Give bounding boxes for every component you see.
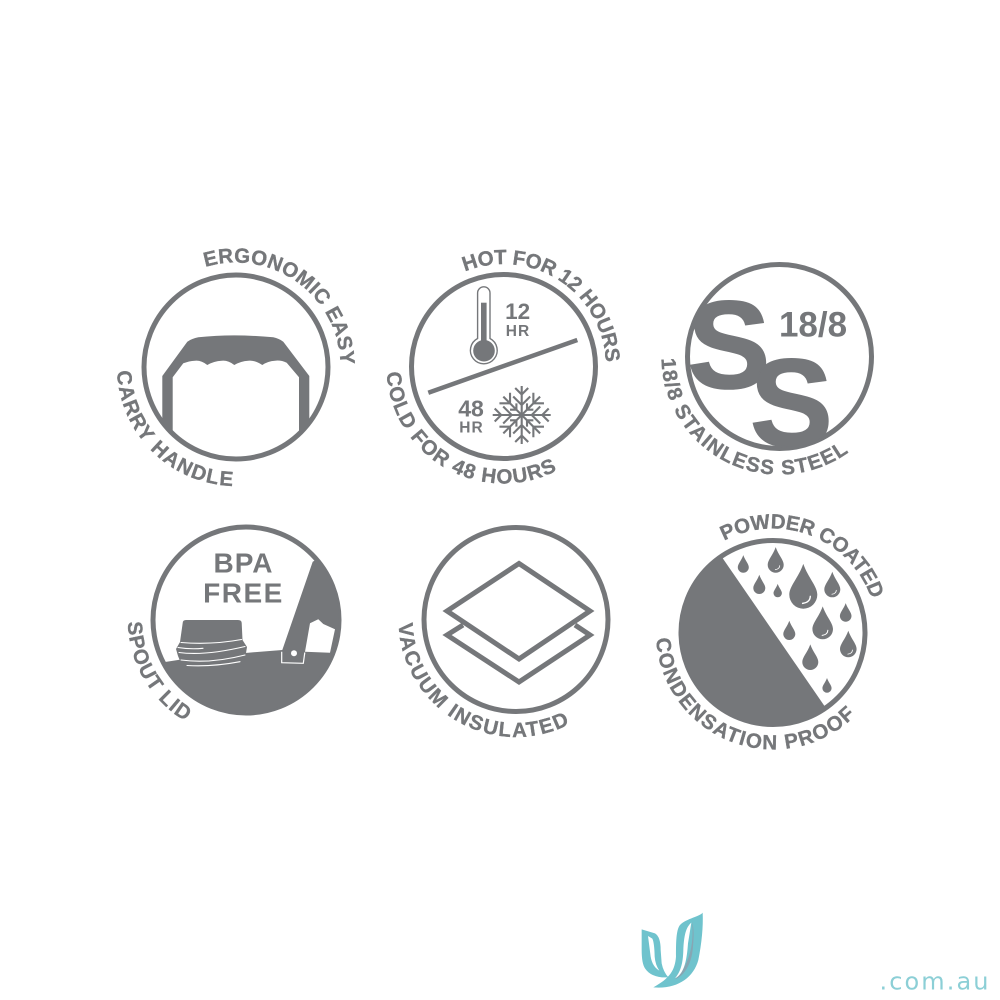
- text: 48 HR: HR: [459, 420, 484, 437]
- icon: stacked layers: [447, 564, 590, 682]
- badge: vacuum insulated: [398, 525, 610, 738]
- icon: hinge: [282, 650, 305, 663]
- right ribbon highlight: [675, 923, 691, 978]
- ring: [144, 275, 328, 459]
- badge: powder coated condensation proof: [656, 514, 882, 750]
- ring: [424, 528, 608, 712]
- divider line: [428, 340, 577, 393]
- ring: [688, 264, 872, 448]
- text: 18/8: 18/8: [779, 306, 847, 344]
- text: 12 HR: 12: [505, 299, 530, 324]
- icon: large SS letters: S: [750, 335, 833, 473]
- icon: spout flap cut-out: [305, 619, 335, 653]
- icon: large SS letters: [688, 277, 833, 473]
- label: ergonomic easy: ERGONOMIC EASY: [203, 248, 355, 364]
- logo: domain text: .com.au: [880, 968, 988, 996]
- icon: large SS letters: S: [688, 277, 770, 415]
- dark ground and spout region: [166, 560, 336, 710]
- label: hot for 12 hours: HOT FOR 12 HOURS: [462, 250, 620, 362]
- icon: thermometer: [470, 287, 497, 364]
- ring: [412, 274, 596, 458]
- text: 12 HR: HR: [506, 323, 530, 340]
- text: BPA FREE: FREE: [203, 578, 284, 609]
- label: spout lid: SPOUT LID: [128, 622, 190, 718]
- icon: snowflake: [493, 386, 551, 444]
- badge: 18/8 stainless steel: [661, 262, 874, 475]
- right ribbon: [653, 913, 703, 988]
- logo: teal U mark: [642, 913, 703, 988]
- label: condensation proof: CONDENSATION PROOF: [656, 638, 852, 750]
- text: BPA FREE: [203, 548, 284, 609]
- right ribbon shade: [675, 922, 694, 979]
- infographic canvas: [117, 248, 986, 990]
- badge: ergonomic easy carry handle: [117, 248, 355, 486]
- text: 48 HR: 48: [458, 396, 484, 422]
- icon: threaded lid: [176, 620, 247, 668]
- left ribbon: [642, 929, 668, 977]
- label: vacuum insulated: VACUUM INSULATED: [398, 622, 568, 738]
- label: carry handle: CARRY HANDLE: [117, 371, 233, 486]
- left ribbon highlight: [648, 936, 659, 971]
- icon: carry handle: [162, 335, 310, 430]
- ring: [153, 527, 339, 713]
- dark half of the circle: [684, 558, 824, 722]
- icon: water drops: [738, 547, 857, 693]
- text: BPA FREE: BPA: [213, 548, 274, 579]
- badge: hot for 12 hours, cold for 48 hours: [386, 250, 620, 484]
- label: cold for 48 hours: COLD FOR 48 HOURS: [386, 372, 556, 484]
- ring: [681, 540, 865, 724]
- label: 18/8 stainless steel: 18/8 STAINLESS STEEL: [661, 359, 848, 475]
- text: 48 HR: [458, 396, 484, 437]
- text: 12 HR: [505, 299, 530, 340]
- badge: BPA free spout lid: [128, 524, 342, 718]
- label: powder coated: POWDER COATED: [719, 514, 882, 596]
